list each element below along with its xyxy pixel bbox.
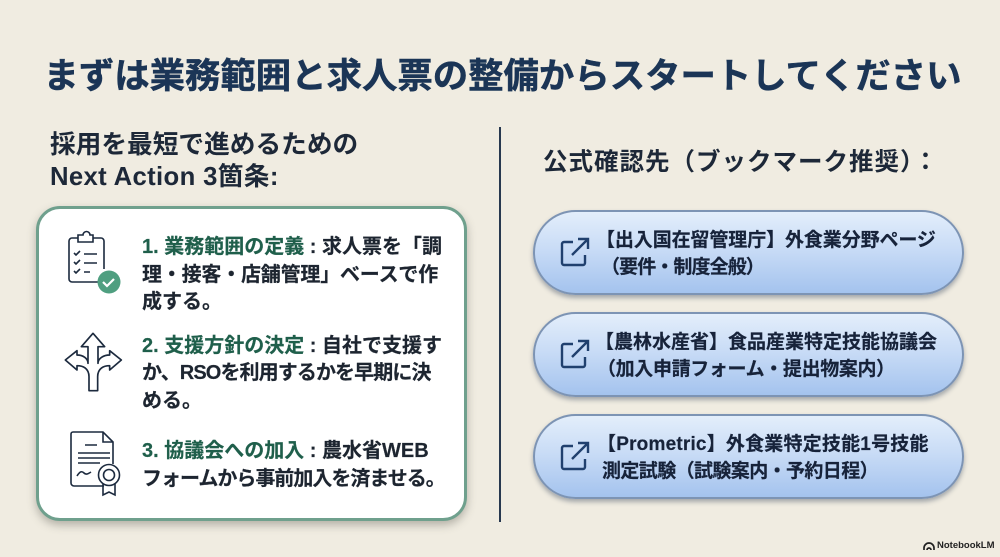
text: item 2: か、RSOを利用するかを早期に決 (142, 362, 431, 384)
icon: certificate document (70, 431, 120, 496)
link pill: agriculture ministry (533, 312, 964, 397)
icon: branching arrows (64, 332, 122, 392)
icon: external link (560, 340, 590, 368)
text: item 1: 成する。 (142, 291, 222, 313)
text: item 3: フォームから事前加入を済ませる。 (142, 468, 445, 490)
icon: checklist (68, 230, 120, 294)
text: item 3: 3. 協議会への加入 : 農水省WEB (142, 440, 429, 462)
text: item 2: める。 (142, 390, 202, 412)
right heading: 公式確認先（ブックマーク推奨）： (543, 149, 939, 176)
text: item 2: 2. 支援方針の決定 : 自社で支援す (142, 335, 442, 357)
left heading: 採用を最短で進めるための (50, 131, 358, 159)
link pill: prometric (533, 414, 964, 499)
panel: next actions (36, 206, 467, 521)
icon: external link (560, 442, 590, 470)
icon: external link (560, 238, 590, 266)
notebooklm logo: NotebookLM (937, 540, 995, 551)
text: item 1: 理・接客・店舗管理」ベースで作 (142, 264, 438, 286)
text: item 1: 1. 業務範囲の定義 : 求人票を「調 (142, 236, 442, 258)
text: item 2 (142, 334, 442, 412)
text: item 3 (142, 440, 445, 490)
left heading (50, 131, 358, 191)
link pill: immigration agency (533, 210, 964, 295)
title: まずは業務範囲と求人票の整備からスタートしてください (43, 56, 962, 96)
link pill: agriculture ministry: 【農林水産省】食品産業特定技能協議会 (595, 332, 937, 353)
divider (499, 127, 501, 522)
link pill: agriculture ministry: （加入申請フォーム・提出物案内） (597, 359, 895, 380)
link pill: immigration agency: 【出入国在留管理庁】外食業分野ページ (596, 230, 936, 251)
link pill: prometric: 【Prometric】外食業特定技能1号技能 (597, 434, 929, 455)
link pill: immigration agency: （要件・制度全般） (601, 257, 764, 278)
link pill: prometric: 測定試験（試験案内・予約日程） (602, 461, 878, 482)
text: item 1 (142, 236, 442, 313)
left heading: Next Action 3箇条: (50, 163, 279, 191)
icon: logo (923, 542, 935, 550)
